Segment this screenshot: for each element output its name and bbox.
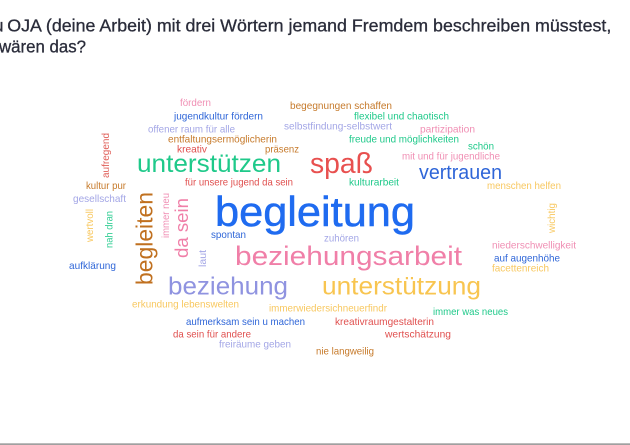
word: beziehungsarbeit: beziehungsarbeit [235, 241, 463, 271]
word: niederschwelligkeit: niederschwelligkeit [492, 239, 576, 251]
word: zuhören: zuhören [324, 233, 359, 245]
word: nah dran: nah dran [104, 211, 116, 248]
word: kreativraumgestalterin: kreativraumgestalterin [335, 316, 434, 328]
word: kreativ: kreativ [177, 144, 208, 156]
word: auf augenhöhe: auf augenhöhe [494, 253, 560, 265]
word: nie langweilig: nie langweilig [316, 345, 374, 357]
word: spontan: spontan [211, 229, 246, 241]
word: da sein für andere: da sein für andere [173, 329, 251, 341]
word: menschen helfen: menschen helfen [487, 180, 561, 192]
word: selbstfindung-selbstwert: selbstfindung-selbstwert [284, 120, 392, 132]
word: facettenreich: facettenreich [492, 263, 549, 275]
bottom border line [0, 443, 630, 445]
word: aufregend: aufregend [100, 133, 112, 178]
word: wertschätzung: wertschätzung [384, 329, 451, 341]
word: wertvoll: wertvoll [84, 209, 96, 243]
word: flexibel und chaotisch: flexibel und chaotisch [354, 110, 449, 122]
title [0, 16, 611, 57]
word: schön: schön [468, 140, 494, 152]
word: erkundung lebenswelten: erkundung lebenswelten [132, 299, 239, 311]
title: OJA (deine Arbeit) mit drei Wörtern jemand Fremdem beschreiben müsstest, [7, 16, 611, 36]
word: fördern: fördern [180, 97, 211, 109]
word: kulturarbeit: kulturarbeit [349, 177, 399, 189]
word cloud [69, 97, 576, 357]
word: wichtig: wichtig [546, 203, 558, 234]
word: begleiten: begleiten [132, 192, 158, 285]
word: begleitung: begleitung [215, 188, 415, 235]
word: begegnungen schaffen: begegnungen schaffen [290, 100, 392, 112]
title: wären das? [0, 37, 86, 57]
word: immer was neues: immer was neues [433, 306, 508, 318]
word: für unsere jugend da sein: für unsere jugend da sein [185, 177, 293, 189]
word: laut: laut [197, 250, 209, 267]
word: da sein: da sein [172, 198, 192, 258]
word: immerwiedersichneuerfindr: immerwiedersichneuerfindr [269, 303, 387, 315]
word: offener raum für alle: offener raum für alle [148, 124, 235, 136]
word: jugendkultur fördern: jugendkultur fördern [173, 110, 263, 122]
word: kultur pur: kultur pur [86, 180, 126, 192]
word: beziehung: beziehung [168, 272, 288, 300]
word: spaß: spaß [310, 148, 373, 180]
word: präsenz: präsenz [265, 144, 299, 156]
word: freiräume geben: freiräume geben [219, 339, 291, 351]
word: gesellschaft: gesellschaft [73, 193, 126, 205]
word: entfaltungsermöglicherin: entfaltungsermöglicherin [168, 134, 277, 146]
word: aufmerksam sein u machen: aufmerksam sein u machen [186, 316, 305, 328]
word: unterstützung: unterstützung [322, 272, 481, 300]
word: vertrauen: vertrauen [419, 162, 502, 184]
word: unterstützen: unterstützen [137, 150, 281, 178]
word: partizipation: partizipation [420, 124, 475, 136]
word: aufklärung: aufklärung [69, 260, 116, 272]
word: mit und für jugendliche: mit und für jugendliche [402, 150, 500, 162]
word: freude und möglichkeiten: freude und möglichkeiten [349, 134, 459, 146]
word: immer neu: immer neu [160, 193, 172, 238]
